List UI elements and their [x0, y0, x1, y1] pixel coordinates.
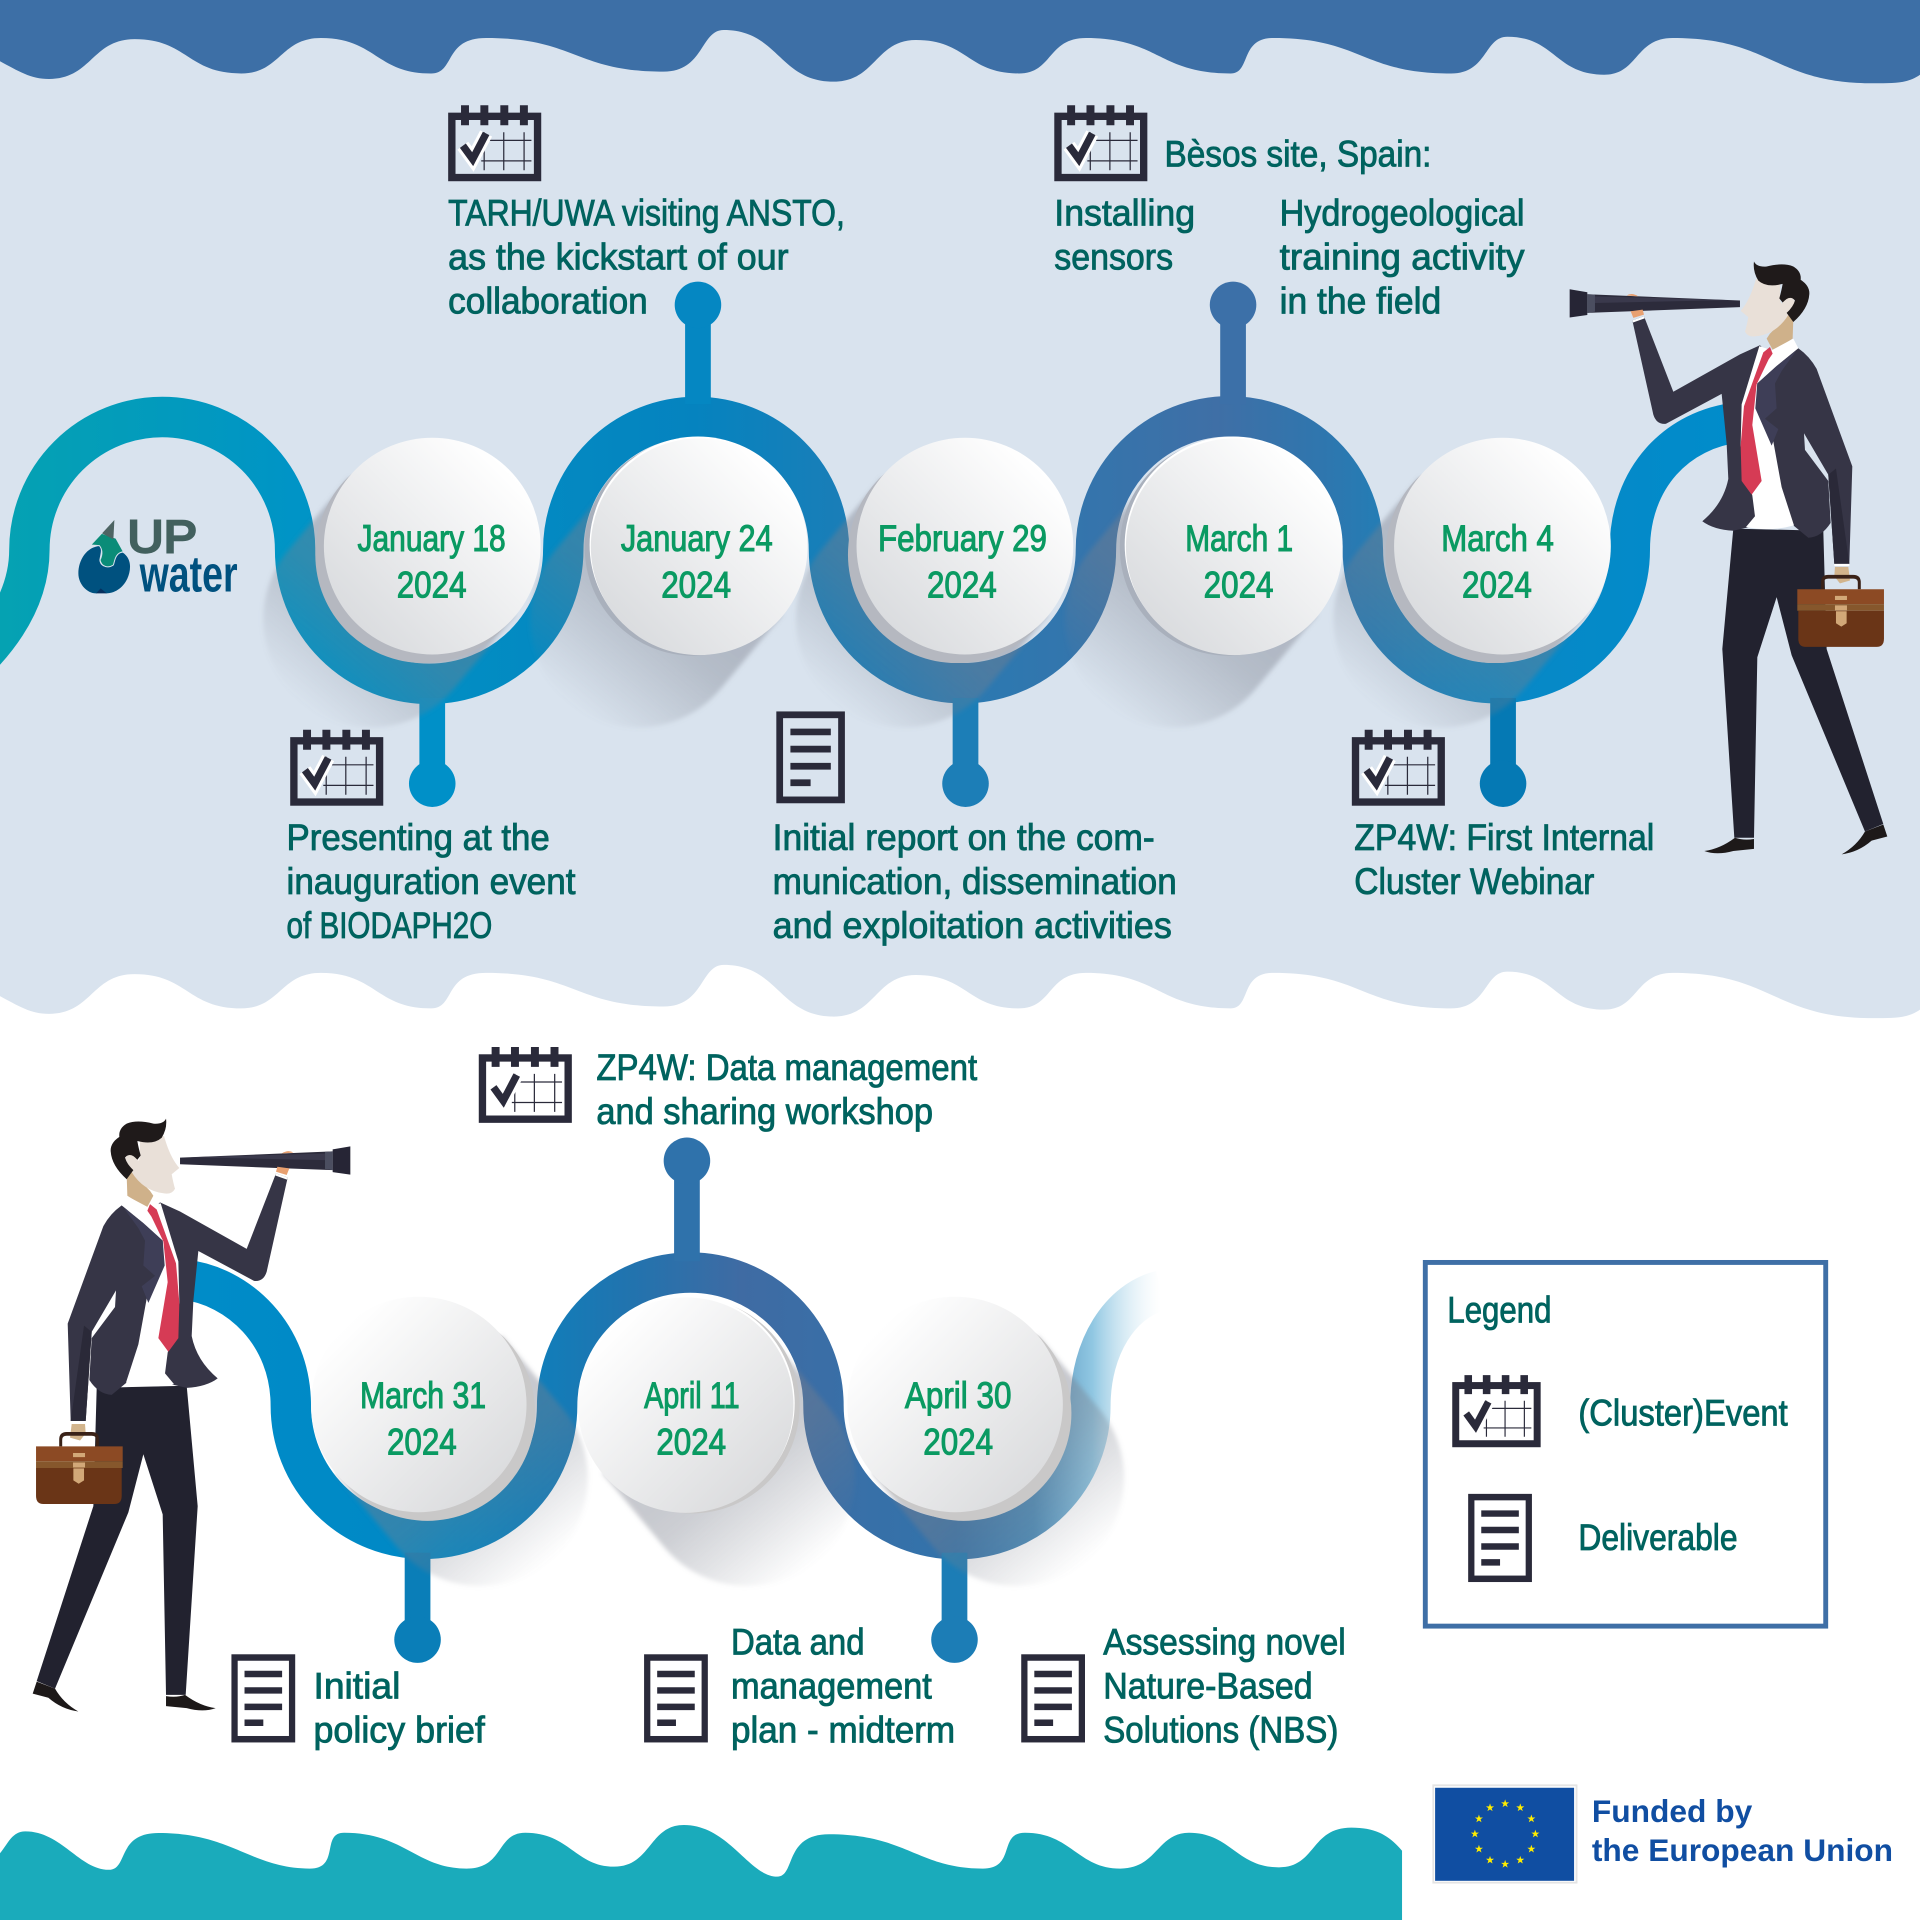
UPWater logo: UP: [127, 511, 197, 562]
icon: calendar: [294, 730, 380, 802]
deliverable: initial report: [773, 715, 1177, 946]
deliverable: nature-based solutions: Nature-Based: [1103, 1665, 1313, 1706]
date circle: January 18: January 18: [358, 518, 506, 559]
icon: document: [1024, 1658, 1082, 1739]
event: Bèsos site: Hydrogeological: [1280, 192, 1524, 233]
date circle: March 4: March 4: [1441, 518, 1554, 559]
legend: (Cluster)Event: [1578, 1392, 1788, 1433]
event: TARH/UWA visiting ANSTO: TARH/UWA visiting ANSTO,: [448, 192, 845, 233]
date circle: March 4: [1386, 438, 1611, 663]
icon: document: [1471, 1497, 1529, 1579]
date circle: January 24: January 24: [621, 518, 773, 559]
top wave: [0, 0, 1920, 83]
deliverable: data management plan: management: [731, 1665, 932, 1706]
icon: calendar: [1356, 730, 1441, 802]
deliverable: policy brief: policy brief: [313, 1709, 486, 1750]
icon: document: [780, 715, 842, 800]
event: BIODAPH2O inauguration: inauguration event: [287, 861, 576, 902]
date circle: March 1: March 1: [1185, 518, 1293, 559]
event: BIODAPH2O inauguration: [287, 730, 576, 946]
deliverable: policy brief: [235, 1658, 486, 1750]
legend: [1425, 1262, 1826, 1626]
event: ZP4W data workshop: and sharing workshop: [596, 1091, 933, 1132]
date circle: March 31: March 31: [360, 1375, 486, 1416]
event: Bèsos site: [1054, 105, 1525, 321]
event: Bèsos site: training activity: [1280, 236, 1525, 277]
icon: document: [647, 1658, 705, 1739]
icon: calendar: [1456, 1375, 1537, 1444]
event: ZP4W webinar: [1354, 730, 1654, 902]
deliverable: data management plan: Data and: [731, 1621, 864, 1662]
event: ZP4W data workshop: ZP4W: Data management: [596, 1047, 977, 1088]
event: TARH/UWA visiting ANSTO: as the kickstart of our: [448, 236, 789, 277]
event: BIODAPH2O inauguration: of BIODAPH2O: [287, 905, 492, 946]
date circle: March 31: 2024: [387, 1422, 457, 1463]
event: ZP4W webinar: Cluster Webinar: [1354, 861, 1594, 902]
date circle: January 24: [585, 437, 808, 656]
date circle: April 11: April 11: [644, 1375, 740, 1416]
deliverable: nature-based solutions: [1024, 1621, 1346, 1750]
deliverable: nature-based solutions: Solutions (NBS): [1103, 1709, 1338, 1750]
deliverable: initial report: and exploitation activities: [773, 905, 1172, 946]
event: Bèsos site: Bèsos site, Spain:: [1164, 134, 1431, 175]
icon: document: [235, 1658, 292, 1739]
event: Bèsos site: Installing: [1054, 192, 1195, 233]
legend: Deliverable: [1578, 1517, 1738, 1558]
date circle: April 11: [578, 1296, 800, 1513]
legend: Legend: [1447, 1289, 1551, 1330]
UPWater logo: water: [139, 544, 238, 602]
date circle: April 11: 2024: [656, 1422, 726, 1463]
UPWater logo: [78, 511, 238, 602]
deliverable: nature-based solutions: Assessing novel: [1103, 1621, 1346, 1662]
date circle: April 30: April 30: [905, 1375, 1011, 1416]
EU funding logo: Funded by: [1592, 1793, 1753, 1829]
event: BIODAPH2O inauguration: Presenting at the: [287, 817, 550, 858]
date circle: March 4: 2024: [1462, 565, 1532, 606]
EU funding logo: [1433, 1785, 1893, 1883]
illustration: businessman with telescope, top: [1570, 261, 1887, 854]
event: ZP4W webinar: ZP4W: First Internal: [1354, 817, 1654, 858]
event: ZP4W data workshop: [482, 1047, 977, 1132]
date circle: March 31: [311, 1297, 535, 1521]
light blue background band: [0, 0, 1920, 1018]
event: Bèsos site: sensors: [1054, 236, 1173, 277]
date circle: March 1: [1120, 437, 1343, 656]
deliverable: policy brief: Initial: [313, 1665, 400, 1706]
date circle: March 1: 2024: [1204, 565, 1273, 606]
date circle: February 29: February 29: [878, 518, 1047, 559]
date circle: February 29: 2024: [927, 565, 997, 606]
date circle: February 29: [848, 438, 1073, 663]
bottom teal wave: [0, 1825, 1402, 1920]
date circle: January 18: 2024: [397, 565, 467, 606]
timeline ribbon row 2: [184, 1138, 1161, 1663]
date circle: April 30: [847, 1297, 1071, 1521]
illustration: businessman with telescope, bottom: [33, 1119, 350, 1711]
event: TARH/UWA visiting ANSTO: [448, 105, 845, 321]
date circle: January 18: [315, 438, 541, 663]
event: Bèsos site: in the field: [1280, 280, 1441, 321]
icon: calendar: [482, 1047, 568, 1119]
deliverable: data management plan: [647, 1621, 955, 1750]
deliverable: data management plan: plan - midterm: [731, 1709, 955, 1750]
event: TARH/UWA visiting ANSTO: collaboration: [448, 280, 648, 321]
date circle: January 24: 2024: [661, 565, 731, 606]
deliverable: initial report: Initial report on the com-: [773, 817, 1155, 858]
deliverable: initial report: munication, dissemination: [773, 861, 1177, 902]
icon: calendar: [452, 105, 538, 178]
EU funding logo: the European Union: [1592, 1832, 1893, 1868]
icon: calendar: [1058, 105, 1144, 178]
date circle: April 30: 2024: [923, 1422, 993, 1463]
circle shadows: [263, 478, 1586, 1586]
timeline ribbon row 1: [0, 282, 1739, 807]
